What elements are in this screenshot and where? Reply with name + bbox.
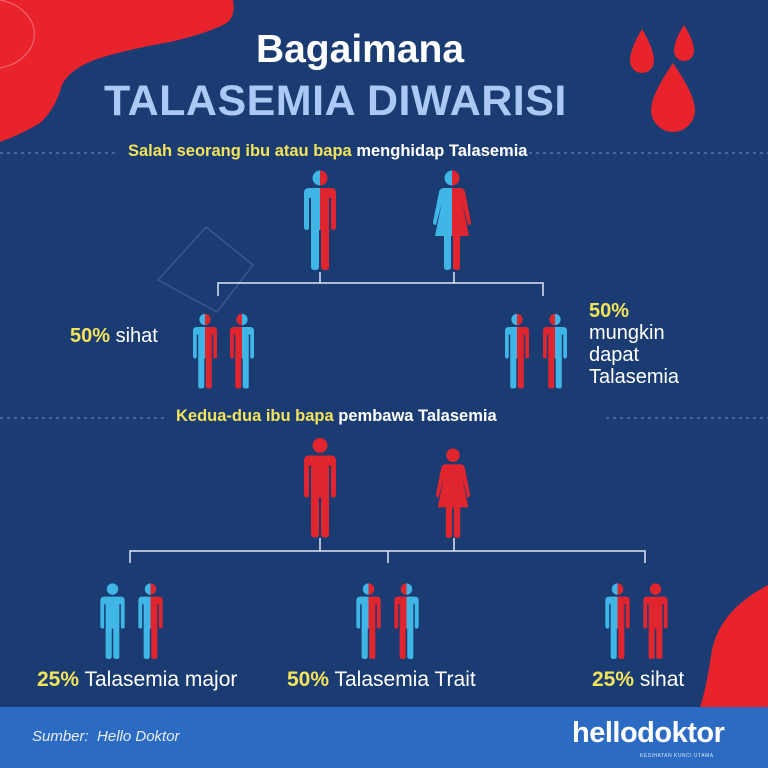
children 1 [193, 314, 567, 388]
label: 25% sihat: 25% sihat [592, 668, 684, 691]
icon: blood drops [630, 25, 695, 132]
title: Bagaimana [256, 28, 464, 71]
footer: KESIHATAN KUNCI UTAMA [640, 753, 714, 759]
label: 50% mungkin: 50% [589, 300, 629, 322]
logo: hellodoktor [572, 717, 724, 749]
heading: section 1: Salah seorang ibu atau bapa menghidap Talasemia [128, 142, 527, 160]
heading: section 2: Kedua-dua ibu bapa pembawa Talasemia [176, 407, 497, 425]
label: 25% major: 25% Talasemia major [37, 668, 237, 691]
tree diagram 2 [100, 438, 668, 659]
label: 50% sihat: 50% sihat [70, 325, 158, 347]
label: 50% mungkin: Talasemia [589, 366, 679, 388]
parents 1 [304, 170, 471, 270]
label: 50% mungkin [589, 300, 679, 388]
label: 50% trait: 50% Talasemia Trait [287, 668, 476, 691]
label: 50% mungkin: dapat [589, 344, 639, 366]
tree diagram 1 [193, 170, 567, 388]
children 2 [100, 583, 668, 659]
title line 2: TALASEMIA DIWARISI [104, 77, 567, 125]
parents 2 [304, 438, 470, 538]
label: 50% mungkin: mungkin [589, 322, 665, 344]
source: Sumber: Hello Doktor [32, 728, 180, 745]
footer [0, 707, 768, 768]
